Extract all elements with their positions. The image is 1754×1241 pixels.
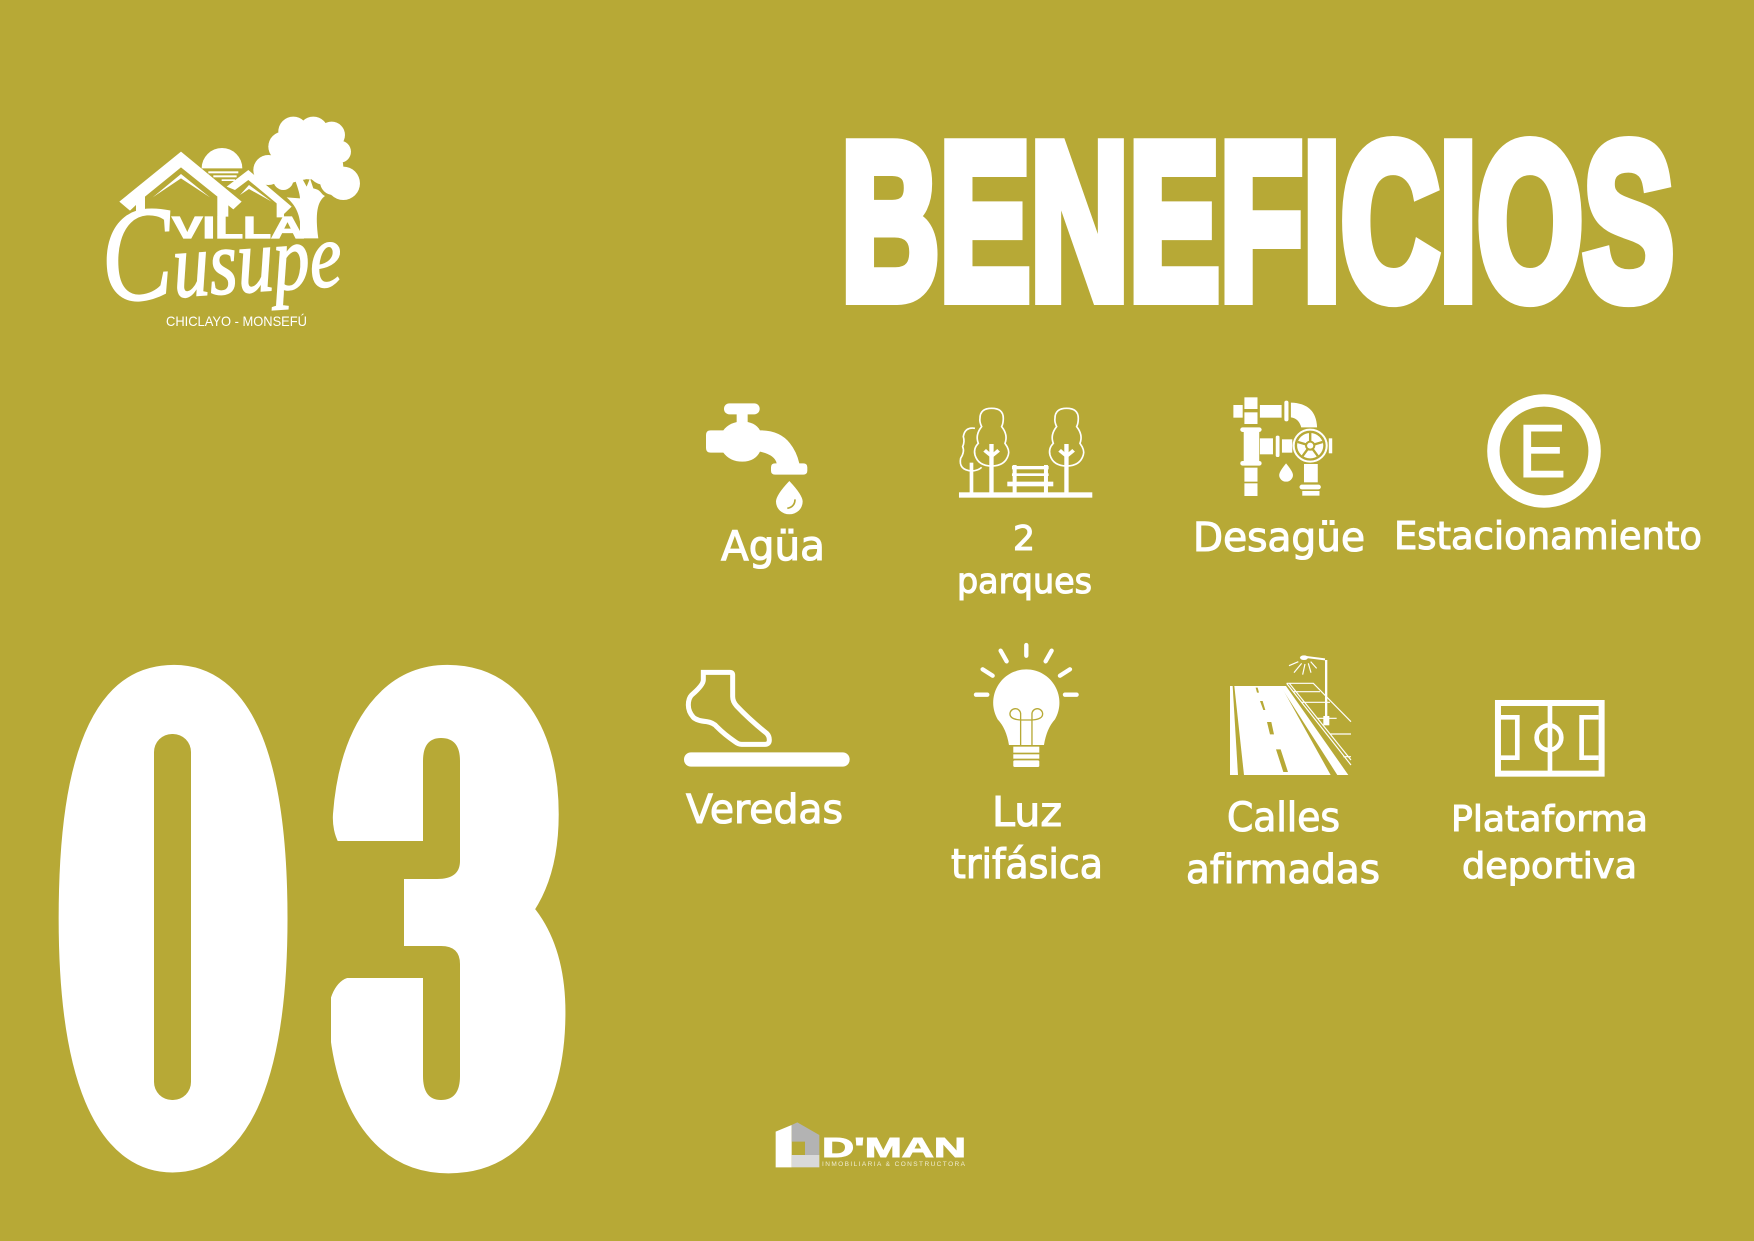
label line 2: trifásica xyxy=(951,840,1103,888)
logo wordmark: Cusupe: Cusupe xyxy=(96,167,346,332)
benefit: agua xyxy=(706,403,825,570)
icon: sports field xyxy=(1498,703,1602,774)
label: Estacionamiento xyxy=(1394,514,1702,558)
number digits: 03 xyxy=(67,578,556,1241)
label word: parques xyxy=(957,562,1092,602)
label xyxy=(1186,795,1380,893)
icon: parking sign xyxy=(1493,400,1595,502)
label xyxy=(957,519,1092,602)
label xyxy=(951,788,1103,888)
benefit: veredas xyxy=(684,672,850,833)
gap between digits xyxy=(293,640,331,1190)
label line 1: Luz xyxy=(992,788,1062,836)
logo wordmark: VILLA: VILLA xyxy=(172,210,304,245)
counter of zero xyxy=(154,734,191,1100)
logo: D'MAN xyxy=(776,1122,966,1168)
label line 2: afirmadas xyxy=(1186,847,1380,893)
benefit: luz trifasica xyxy=(951,645,1103,888)
label: Agüa xyxy=(721,522,825,570)
label line 1: Plataforma xyxy=(1451,799,1648,840)
benefit: desague xyxy=(1193,397,1365,561)
label: Desagüe xyxy=(1193,515,1365,561)
logo icon: houses, sun and tree xyxy=(119,117,360,238)
big number xyxy=(67,578,556,1241)
benefit: estacionamiento xyxy=(1394,400,1702,558)
icon: road with street lamp xyxy=(1230,655,1351,775)
label number: 2 xyxy=(1013,519,1035,559)
benefit: parques xyxy=(957,408,1092,602)
label line 2: deportiva xyxy=(1462,846,1637,887)
label xyxy=(1451,799,1648,887)
logo tagline: INMOBILIARIA & CONSTRUCTORA xyxy=(822,1161,966,1168)
logo location: CHICLAYO - MONSEFÚ xyxy=(166,313,307,329)
patch of three xyxy=(405,975,472,1035)
label: Veredas xyxy=(686,787,843,833)
icon: park with trees and bench xyxy=(959,408,1092,498)
benefit: plataforma deportiva xyxy=(1451,703,1648,887)
counter of three xyxy=(320,738,460,1100)
icon: pipes and valve xyxy=(1233,397,1332,496)
icon: parking sign: E xyxy=(1518,409,1566,493)
benefit: calles afirmadas xyxy=(1186,655,1380,893)
icon: foot on sidewalk xyxy=(684,672,850,767)
logo icon: house xyxy=(776,1122,819,1167)
icon: light bulb xyxy=(976,645,1077,767)
icon: faucet xyxy=(706,403,807,514)
logo: Villa Cusupe xyxy=(96,117,360,332)
label line 1: Calles xyxy=(1227,795,1340,841)
logo wordmark: D'MAN xyxy=(822,1132,966,1163)
